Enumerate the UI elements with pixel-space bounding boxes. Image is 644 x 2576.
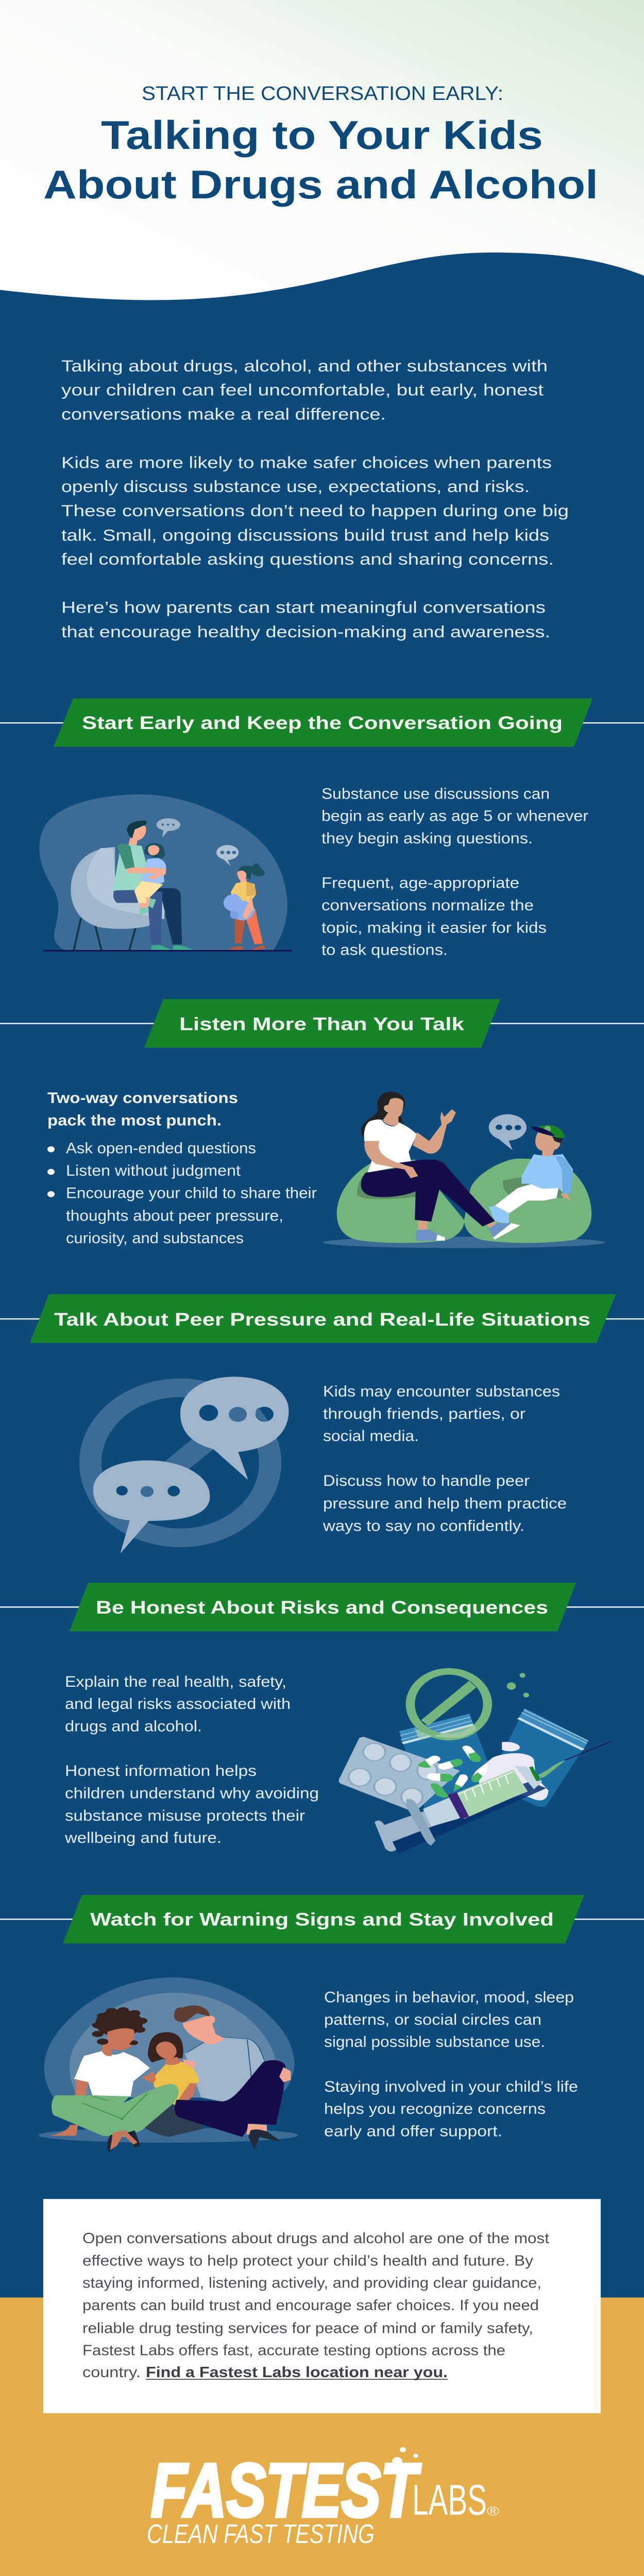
section 3 text: Kids may encounter substances bbox=[323, 1383, 560, 1400]
bold lead: Two-way conversations bbox=[47, 1090, 238, 1107]
section 4 text: substance misuse protects their bbox=[65, 1807, 305, 1824]
section 3 heading banner: Talk About Peer Pressure and Real-Life Situations bbox=[54, 1310, 590, 1330]
section 4 text: children understand why avoiding bbox=[65, 1785, 319, 1802]
bullet list bbox=[47, 1140, 317, 1246]
section 1 text: conversations normalize the bbox=[321, 897, 534, 913]
intro text: Kids are more likely to make safer choices when parents bbox=[61, 453, 552, 472]
intro text: Here’s how parents can start meaningful conversations bbox=[61, 598, 546, 617]
section 4 text: Explain the real health, safety, bbox=[65, 1673, 286, 1690]
section 4 text: Honest information helps bbox=[65, 1762, 257, 1780]
section 3 heading banner bbox=[0, 1294, 644, 1343]
bullet list: Listen without judgment bbox=[66, 1162, 241, 1179]
gold footer background bbox=[0, 2297, 644, 2576]
powder bbox=[477, 1742, 548, 1808]
intro text: talk. Small, ongoing discussions build trust and help kids bbox=[61, 526, 549, 545]
closing callout panel: country. bbox=[82, 2364, 141, 2380]
speech bubbles bbox=[157, 818, 239, 866]
illustration: family sitting together bbox=[39, 1977, 298, 2153]
section 3 text: pressure and help them practice bbox=[323, 1495, 567, 1512]
woman bbox=[361, 1092, 520, 1241]
section 1 text: they begin asking questions. bbox=[321, 830, 533, 846]
section 1 text: begin as early as age 5 or whenever bbox=[321, 807, 588, 824]
title: About Drugs and Alcohol bbox=[43, 163, 598, 207]
closing callout panel: reliable drug testing services for peace of mind or family safety, bbox=[82, 2320, 533, 2336]
logo: ® bbox=[487, 2504, 499, 2518]
section 4 text: and legal risks associated with bbox=[65, 1696, 291, 1713]
section 5 text: patterns, or social circles can bbox=[324, 2011, 541, 2028]
section 4 heading banner bbox=[0, 1583, 644, 1631]
closing callout panel: staying informed, listening actively, and providing clear guidance, bbox=[82, 2275, 541, 2291]
intro text: feel comfortable asking questions and sharing concerns. bbox=[61, 550, 554, 568]
section 5 heading banner: Watch for Warning Signs and Stay Involved bbox=[90, 1910, 554, 1929]
blister pack bbox=[339, 1737, 460, 1812]
prohibition sign bbox=[406, 1668, 529, 1740]
intro text: that encourage healthy decision-making and awareness. bbox=[61, 623, 550, 641]
intro text bbox=[61, 357, 569, 641]
section 5 text: helps you recognize concerns bbox=[324, 2100, 546, 2117]
father legs bbox=[175, 2060, 291, 2149]
section 2 heading banner: Listen More Than You Talk bbox=[179, 1014, 465, 1035]
daughter bbox=[143, 2032, 206, 2137]
lower bubble bbox=[93, 1461, 210, 1553]
section 1 text bbox=[321, 785, 588, 958]
father bbox=[174, 2006, 267, 2102]
section 1 text: topic, making it easier for kids bbox=[321, 919, 547, 936]
intro text: conversations make a real difference. bbox=[61, 405, 386, 423]
speech bubble bbox=[489, 1114, 527, 1150]
tagline: CLEAN FAST TESTING bbox=[147, 2519, 375, 2549]
intro text: openly discuss substance use, expectations, and risks. bbox=[61, 478, 530, 496]
section 4 text bbox=[64, 1673, 319, 1846]
section 3 text: ways to say no confidently. bbox=[323, 1517, 524, 1534]
standing child with teddy bbox=[224, 863, 265, 950]
section 3 text: social media. bbox=[323, 1428, 419, 1444]
right bag bbox=[487, 1708, 588, 1807]
parent figure bbox=[113, 821, 193, 951]
logo: LABS bbox=[412, 2476, 487, 2524]
section 3 text bbox=[323, 1383, 567, 1534]
closing callout panel: Fastest Labs offers fast, accurate testing options across the bbox=[82, 2342, 505, 2359]
section 1 text: Frequent, age-appropriate bbox=[321, 874, 519, 891]
bullet list: Ask open-ended questions bbox=[66, 1140, 256, 1157]
section 5 heading banner bbox=[0, 1895, 644, 1943]
section 3 text: Discuss how to handle peer bbox=[323, 1472, 530, 1489]
illustration: parent and two children talking bbox=[39, 794, 292, 952]
closing callout panel bbox=[43, 2199, 601, 2413]
floor line bbox=[43, 950, 292, 952]
header panel with wave bbox=[0, 0, 644, 300]
section 5 text bbox=[324, 1989, 578, 2140]
section 1 heading banner: Start Early and Keep the Conversation Going bbox=[82, 713, 563, 733]
chair bbox=[71, 847, 166, 950]
title bbox=[43, 113, 598, 207]
closing callout panel: Open conversations about drugs and alcohol are one of the most bbox=[82, 2230, 549, 2246]
section 4 text: wellbeing and future. bbox=[64, 1829, 222, 1846]
title: Talking to Your Kids bbox=[101, 113, 543, 158]
section 2 heading banner bbox=[0, 999, 644, 1048]
section 5 text: signal possible substance use. bbox=[324, 2033, 545, 2050]
child on lap bbox=[127, 843, 166, 916]
illustration: pills, bags, syringe and prohibition sign bbox=[339, 1668, 612, 1854]
illustration: parent and child on beanbags bbox=[323, 1092, 605, 1248]
bullet list: Encourage your child to share their bbox=[66, 1184, 317, 1201]
subtitle: START THE CONVERSATION EARLY: bbox=[142, 82, 503, 104]
bold lead: pack the most punch. bbox=[47, 1112, 222, 1129]
section 5 text: early and offer support. bbox=[324, 2123, 502, 2140]
boy bbox=[489, 1125, 573, 1224]
link: Find a Fastest Labs location near you. bbox=[146, 2364, 448, 2380]
section 3 text: through friends, parties, or bbox=[323, 1405, 526, 1422]
bold lead bbox=[47, 1090, 238, 1129]
section 1 text: Substance use discussions can bbox=[321, 785, 550, 802]
capsules bbox=[418, 1745, 488, 1798]
section 1 heading banner bbox=[0, 699, 644, 747]
upper bubble bbox=[180, 1377, 289, 1480]
mother bbox=[49, 2007, 179, 2153]
section 5 text: Staying involved in your child’s life bbox=[324, 2078, 578, 2095]
syringe bbox=[375, 1741, 612, 1854]
bullet list: curiosity, and substances bbox=[66, 1230, 244, 1246]
closing callout panel: parents can build trust and encourage safer choices. If you need bbox=[82, 2297, 539, 2313]
beanbags bbox=[337, 1159, 591, 1243]
intro text: your children can feel uncomfortable, but early, honest bbox=[61, 381, 544, 399]
logo: FASTEST bbox=[151, 2448, 421, 2533]
section 5 text: Changes in behavior, mood, sleep bbox=[324, 1989, 574, 2006]
prohibition ring bbox=[79, 1379, 281, 1547]
intro text: Talking about drugs, alcohol, and other substances with bbox=[61, 357, 548, 375]
illustration: speech bubbles over prohibition sign bbox=[79, 1377, 289, 1553]
section 4 text: drugs and alcohol. bbox=[65, 1718, 202, 1735]
section 2 text bbox=[47, 1090, 317, 1246]
section 4 heading banner: Be Honest About Risks and Consequences bbox=[96, 1598, 548, 1618]
left bag bbox=[399, 1714, 493, 1821]
bullet list: thoughts about peer pressure, bbox=[66, 1207, 283, 1224]
section 1 text: to ask questions. bbox=[321, 941, 448, 958]
intro text: These conversations don’t need to happen during one big bbox=[61, 502, 569, 520]
closing callout panel: effective ways to help protect your child’s health and future. By bbox=[82, 2252, 533, 2269]
